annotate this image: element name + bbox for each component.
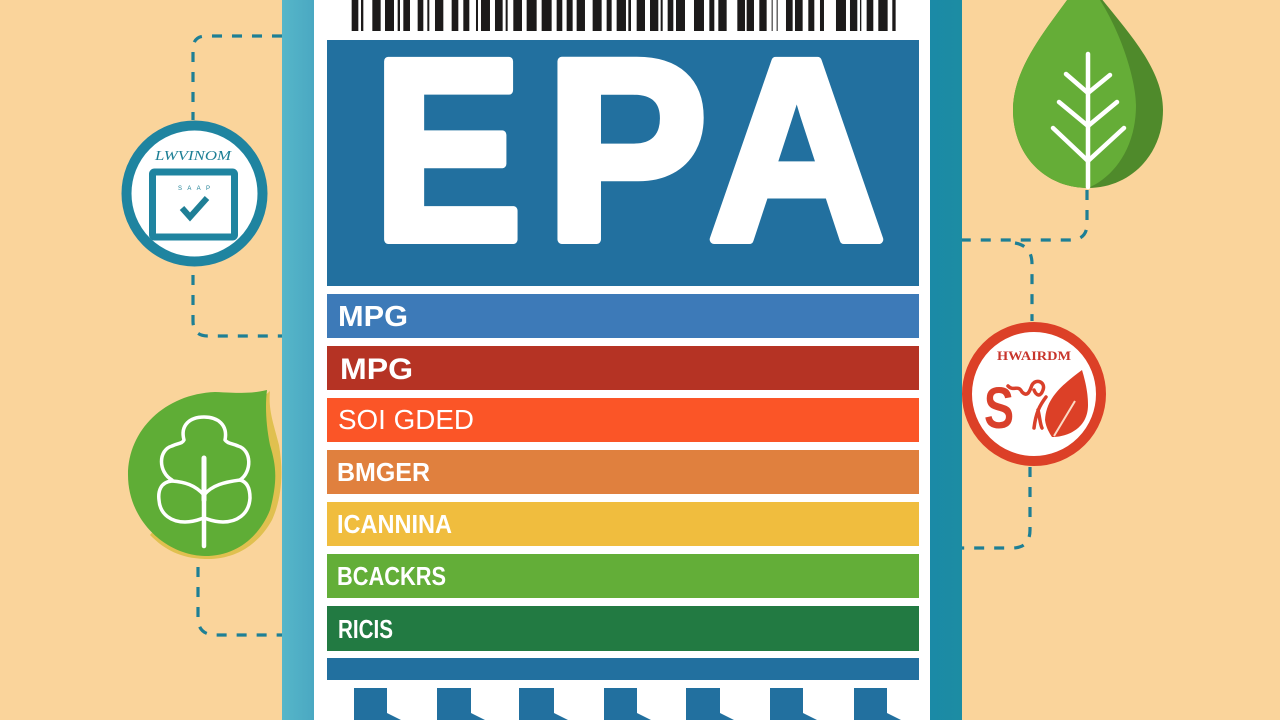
rating bar: blue: MPG bbox=[338, 301, 408, 333]
badge caption: LWVINOM bbox=[154, 149, 233, 164]
leaf light side bbox=[1013, 0, 1136, 188]
EPA header block bbox=[327, 5, 919, 295]
barcode bbox=[352, 0, 896, 31]
squiggle bbox=[1008, 381, 1046, 428]
rating bar: light green: BCACKRS bbox=[337, 561, 446, 591]
icon: checkbox badge bbox=[126, 126, 262, 262]
connector: top left bbox=[193, 36, 282, 120]
rating bar: orange: BMGER bbox=[337, 457, 430, 487]
rating bar: blue bbox=[327, 294, 919, 338]
rating bar: yellow: ICANNINA bbox=[337, 509, 452, 539]
rating bar: yellow bbox=[327, 502, 919, 546]
left card strip bbox=[282, 0, 314, 720]
rating bar: dark green bbox=[327, 606, 919, 651]
right card strip bbox=[930, 0, 962, 720]
EPA heading: P bbox=[545, 6, 708, 295]
connector: bottom left bbox=[198, 567, 282, 635]
connector: middle right bbox=[1015, 243, 1032, 321]
leaf shadow bbox=[150, 391, 281, 559]
icon: green tree leaf bbox=[128, 390, 281, 559]
window outline bbox=[152, 172, 234, 237]
red leaf vein bbox=[1054, 401, 1075, 436]
card body bbox=[314, 0, 930, 720]
rating bar: orange bbox=[327, 450, 919, 494]
connector: middle left bbox=[193, 275, 282, 336]
EPA heading bbox=[373, 5, 885, 295]
red leaf bbox=[1045, 370, 1088, 437]
icon: green drop leaf bbox=[1013, 0, 1163, 188]
tree outline bbox=[159, 417, 250, 546]
dollar sign: S bbox=[984, 376, 1014, 441]
rating bar: light green bbox=[327, 554, 919, 598]
rating bar: dark red: MPG bbox=[340, 353, 413, 386]
icon: red cost and leaf badge bbox=[967, 327, 1101, 461]
connector: bottom right bbox=[962, 467, 1030, 548]
rating bar: dark red bbox=[327, 346, 919, 390]
connector: top right bbox=[962, 190, 1087, 240]
rating bar: orange red: SOI GDED bbox=[338, 404, 474, 435]
leaf shadow side bbox=[1013, 0, 1163, 188]
panel: label card bbox=[282, 0, 962, 720]
EPA heading: E bbox=[373, 6, 522, 295]
rating bar: orange red bbox=[327, 398, 919, 442]
blue footer band bbox=[327, 658, 919, 680]
badge caption: HWAIRDM bbox=[997, 348, 1071, 363]
leaf body bbox=[128, 390, 275, 556]
check mark bbox=[182, 198, 207, 217]
rating bar: dark green: RICIS bbox=[338, 614, 393, 644]
leaf veins bbox=[1053, 54, 1124, 187]
EPA heading: A bbox=[708, 5, 885, 295]
foot tabs bbox=[354, 688, 901, 720]
window caption: SAAP bbox=[178, 186, 210, 192]
